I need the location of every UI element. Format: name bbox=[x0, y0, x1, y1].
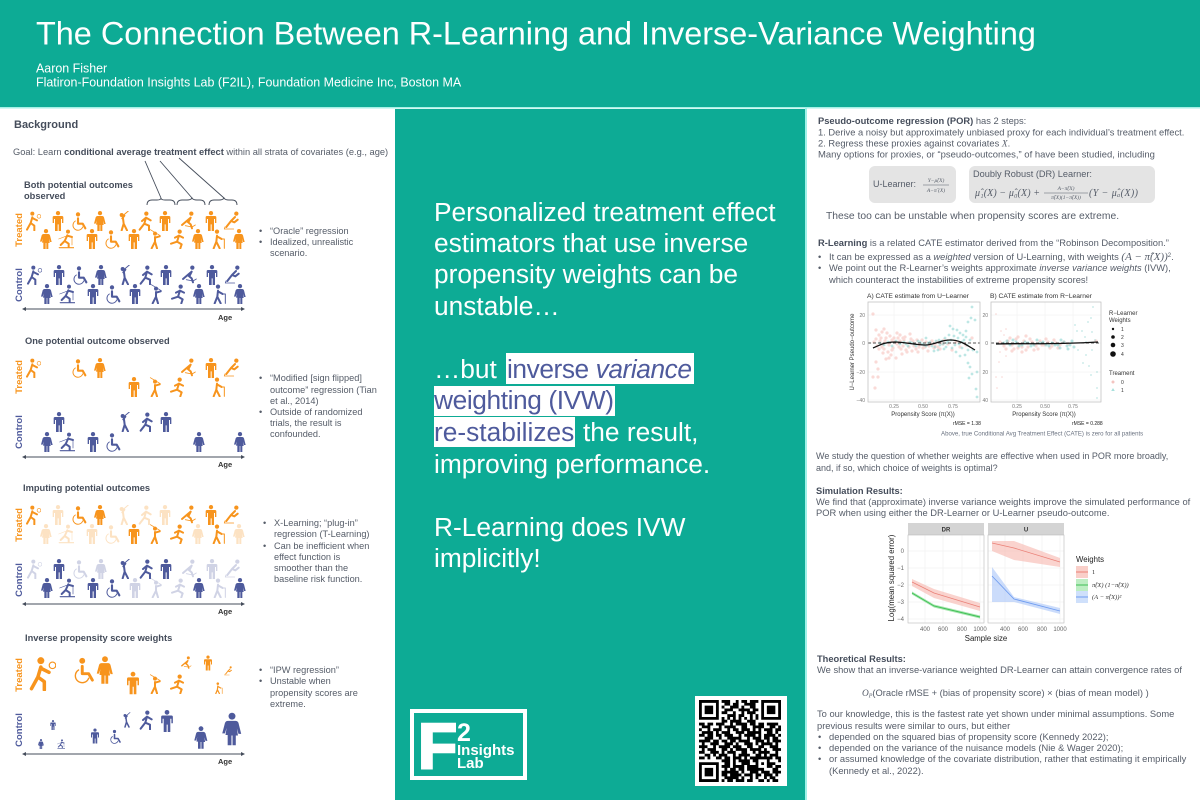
legend: weights and treatment: Weights bbox=[1109, 318, 1131, 324]
notes: x-learning: effect function is bbox=[274, 552, 341, 562]
control icons bbox=[28, 265, 246, 304]
R-learning text: We point out the R-Learner’s weights approximate inverse variance weights (IVW), bbox=[829, 263, 1171, 273]
simulation results text: Simulation Results: bbox=[816, 486, 903, 496]
control icons bbox=[41, 412, 246, 452]
panel B: CATE estimate from R-Learner: 20 bbox=[982, 313, 988, 319]
notes: modified outcome regression: Outside of randomized bbox=[270, 407, 362, 417]
panel: methods and results bbox=[816, 116, 1191, 776]
panel B: CATE estimate from R-Learner: 0 bbox=[985, 341, 988, 347]
axes: 400 bbox=[1000, 627, 1011, 633]
line chart: log mean squared error by sample size: Log(mean squared error) bbox=[887, 534, 896, 621]
notes: modified outcome regression: outcome” regression (Tian bbox=[270, 385, 377, 395]
pseudo-outcome regression text bbox=[818, 116, 1184, 160]
theoretical results text: • bbox=[818, 743, 821, 753]
message: unstable estimators bbox=[434, 197, 776, 321]
legend: weights and treatment: 1 bbox=[1121, 327, 1124, 333]
message: inverse variance weighting highlight: …but bbox=[434, 354, 498, 384]
notes: x-learning: smoother than the bbox=[274, 563, 348, 573]
message: unstable estimators: Personalized treatment effect bbox=[434, 197, 776, 227]
section 1: both potential outcomes: Both potential outcomes bbox=[24, 180, 133, 190]
authors bbox=[36, 62, 462, 90]
QR code bbox=[695, 696, 787, 786]
axes: 1000 bbox=[1053, 627, 1067, 633]
logo: F2 Insights Lab: 2 bbox=[457, 719, 471, 747]
line chart: log mean squared error by sample size: Sample size bbox=[965, 634, 1007, 643]
panel A: CATE estimate from U-Learner: −20 bbox=[857, 370, 865, 376]
R-learning text: It can be expressed as a weighted version of U-Learning, with weights (A − π̂(X)) bbox=[829, 251, 1168, 263]
theoretical results text bbox=[817, 654, 1187, 776]
treated label: Treated bbox=[14, 213, 25, 247]
notes: oracle regression: Idealized, unrealistic bbox=[270, 237, 354, 247]
theoretical results text: P bbox=[868, 694, 873, 700]
axes: −2 bbox=[897, 583, 905, 589]
goal text: Goal: Learn conditional average treatment effect within all strata of covariates (e.g., age) bbox=[13, 147, 388, 157]
message: unstable estimators: unstable… bbox=[434, 291, 560, 321]
panel B: CATE estimate from R-Learner: 0.25 bbox=[1012, 404, 1022, 410]
message: unstable estimators: propensity weights can be bbox=[434, 259, 738, 289]
notes: ipw regression: • bbox=[259, 665, 262, 675]
theoretical results text: O bbox=[862, 689, 869, 699]
message: inverse variance weighting highlight: improving performance. bbox=[434, 449, 710, 479]
section 4: inverse propensity score weights: Inverse propensity score weights bbox=[25, 633, 172, 643]
R-learning text: • bbox=[818, 252, 821, 262]
pseudo-outcome regression text: Pseudo-outcome regression (POR) has 2 steps: bbox=[818, 116, 1026, 126]
axes: 600 bbox=[1018, 627, 1029, 633]
panel B: CATE estimate from R-Learner: 20 bbox=[982, 370, 988, 376]
panel A: CATE estimate from U-Learner bbox=[850, 293, 981, 427]
notes: x-learning: Can be inefficient when bbox=[274, 541, 369, 551]
notes: ipw regression bbox=[259, 665, 358, 709]
control label: Control bbox=[14, 268, 25, 302]
panel B: CATE estimate from R-Learner: Propensity Score (π(X)) bbox=[1012, 412, 1076, 418]
axes: 600 bbox=[938, 627, 949, 633]
age axis bbox=[22, 307, 245, 322]
age axis: Age bbox=[218, 607, 232, 616]
section 1: both potential outcomes: observed bbox=[24, 191, 66, 201]
age axis bbox=[22, 752, 245, 766]
R-learning text: • bbox=[818, 263, 821, 273]
formula box: DR Learner bbox=[969, 166, 1155, 203]
theoretical results text: previous results were similar to ours, but either bbox=[817, 721, 1010, 731]
logo: F2 Insights Lab: Insights bbox=[457, 742, 515, 759]
section 3: imputing potential outcomes bbox=[14, 483, 370, 616]
message: unstable estimators: estimators that use inverse bbox=[434, 228, 748, 258]
theoretical results text: depended on the squared bias of propensity score (Kennedy 2022); bbox=[829, 732, 1108, 742]
panel B: CATE estimate from R-Learner: 0.50 bbox=[1040, 404, 1050, 410]
treated icons bbox=[27, 358, 238, 397]
simulation results text: We find that (approximate) inverse variance weights improve the simulated performance of bbox=[816, 497, 1191, 507]
note: unstable: These too can be unstable when propensity scores are extreme. bbox=[826, 211, 1119, 222]
authors: Flatiron-Foundation Insights Lab (F2IL), Foundation Medicine Inc, Boston MA bbox=[36, 76, 462, 90]
panel A: CATE estimate from U-Learner: 0.75 bbox=[948, 404, 958, 410]
notes: modified outcome regression: • bbox=[259, 373, 262, 383]
formula box: DR Learner: Doubly Robust (DR) Learner: bbox=[973, 169, 1092, 179]
legend: weights: 1 bbox=[1092, 569, 1095, 576]
panel A: CATE estimate from U-Learner: Propensity Score (π(X)) bbox=[891, 412, 955, 418]
axes: 0 bbox=[901, 549, 905, 555]
edge strip of right panel bbox=[805, 108, 807, 800]
notes: x-learning: X-Learning; “plug-in” bbox=[274, 518, 358, 528]
header band bbox=[0, 0, 1200, 108]
R-learning text: 2 bbox=[1168, 253, 1172, 259]
R-learning text: . bbox=[1171, 252, 1174, 262]
facet: DR: DR bbox=[942, 528, 951, 534]
legend: weights: π̂(X) (1−π̂(X)) bbox=[1092, 582, 1129, 589]
legend: weights and treatment: 1 bbox=[1121, 388, 1124, 394]
legend: weights bbox=[1076, 555, 1129, 603]
question text: We study the question of whether weights are effective when used in POR more broadly, bbox=[816, 451, 1168, 461]
panel B: CATE estimate from R-Learner bbox=[982, 293, 1103, 427]
theoretical results text: (Kennedy et al., 2022). bbox=[829, 766, 924, 776]
treated icons sized by weight bbox=[32, 656, 232, 694]
message: r-learning: implicitly! bbox=[434, 543, 541, 573]
R-learning text: R-Learning is a related CATE estimator derived from the “Robinson Decomposition.” bbox=[818, 238, 1169, 248]
theoretical results text: To our knowledge, this is the fastest rate yet shown under minimal assumptions. Some bbox=[817, 709, 1174, 719]
facet: U: U bbox=[1024, 528, 1028, 534]
logo: F2 Insights Lab: Lab bbox=[457, 755, 484, 772]
panel A: CATE estimate from U-Learner: 0 bbox=[862, 341, 865, 347]
axes: 400 bbox=[920, 627, 931, 633]
theoretical results text: We show that an inverse-variance weighted DR-Learner can attain convergence rates of bbox=[817, 665, 1182, 675]
notes: modified outcome regression: confounded. bbox=[270, 429, 321, 439]
notes: oracle regression: • bbox=[259, 237, 262, 247]
notes: x-learning: • bbox=[263, 518, 266, 528]
panel A: CATE estimate from U-Learner: rMSE = 1.38 bbox=[953, 421, 981, 427]
axes: −3 bbox=[897, 600, 905, 606]
section 4: inverse propensity score weights bbox=[14, 633, 358, 766]
age axis: Age bbox=[218, 460, 232, 469]
theoretical results text: • bbox=[818, 732, 821, 742]
legend: weights and treatment bbox=[1109, 311, 1138, 394]
legend: weights: (A − π̂(X))² bbox=[1092, 594, 1122, 601]
control icons bbox=[28, 559, 246, 598]
notes: ipw regression: extreme. bbox=[270, 699, 306, 709]
brace connectors bbox=[145, 158, 237, 205]
notes: ipw regression: “IPW regression” bbox=[270, 665, 339, 675]
section 2: one potential outcome bbox=[14, 336, 377, 469]
theoretical results text: or assumed knowledge of the covariate distribution, rather that estimating it empirically bbox=[829, 754, 1187, 764]
panel A: CATE estimate from U-Learner: −40 bbox=[857, 398, 865, 404]
panel B: CATE estimate from R-Learner: 0.75 bbox=[1068, 404, 1078, 410]
heading: background: Background bbox=[14, 119, 78, 131]
notes: modified outcome regression bbox=[259, 373, 377, 439]
R-learning text bbox=[818, 238, 1174, 285]
legend: weights and treatment: 3 bbox=[1121, 343, 1124, 349]
axes: 1000 bbox=[973, 627, 987, 633]
control label: Control bbox=[14, 563, 25, 597]
age axis: Age bbox=[218, 313, 232, 322]
authors: Aaron Fisher bbox=[36, 62, 107, 76]
notes: modified outcome regression: • bbox=[259, 407, 262, 417]
question text bbox=[816, 451, 1168, 473]
legend: weights and treatment: 2 bbox=[1121, 335, 1124, 341]
notes: x-learning: • bbox=[263, 541, 266, 551]
treated label: Treated bbox=[14, 360, 25, 394]
message: r-learning bbox=[434, 512, 686, 573]
notes: x-learning: baseline risk function. bbox=[274, 574, 362, 584]
notes: oracle regression: “Oracle” regression bbox=[270, 226, 349, 236]
legend: weights and treatment: 4 bbox=[1121, 352, 1124, 358]
panel A: CATE estimate from U-Learner: 20 bbox=[859, 313, 865, 319]
treated icons bbox=[27, 211, 245, 249]
treated label: Treated bbox=[14, 508, 25, 542]
notes: x-learning: regression (T-Learning) bbox=[274, 529, 370, 539]
facet: DR bbox=[908, 523, 984, 623]
panel: background bbox=[13, 119, 388, 766]
notes: oracle regression: scenario. bbox=[270, 248, 307, 258]
notes: oracle regression bbox=[259, 226, 354, 258]
message: r-learning: R-Learning does IVW bbox=[434, 512, 686, 542]
panel B: CATE estimate from R-Learner: B) CATE estimate from R−Learner bbox=[990, 293, 1093, 300]
panel B: CATE estimate from R-Learner: 40 bbox=[982, 398, 988, 404]
legend: weights: Weights bbox=[1076, 555, 1104, 564]
notes: ipw regression: • bbox=[259, 676, 262, 686]
panel A: CATE estimate from U-Learner: U−Learner Pseudo−outcome bbox=[850, 313, 856, 391]
theoretical results text: • bbox=[818, 754, 821, 764]
formula box: DR Learner: (Y − μ̂ₐ(X)) bbox=[1089, 188, 1139, 199]
notes: oracle regression: • bbox=[259, 226, 262, 236]
chart caption: Above, true Conditional Avg Treatment Effect (CATE) is zero for all patients bbox=[941, 430, 1143, 438]
control label: Control bbox=[14, 713, 25, 747]
formula box: U-Learner: A−π̂ (X) bbox=[926, 187, 945, 194]
facet: U bbox=[988, 523, 1064, 623]
panel A: CATE estimate from U-Learner: A) CATE estimate from U−Learner bbox=[867, 293, 970, 300]
treated icons bbox=[27, 505, 245, 544]
notes: x-learning bbox=[263, 518, 370, 584]
legend: weights and treatment: Treament bbox=[1109, 371, 1135, 377]
control icons sized by weight bbox=[38, 710, 241, 749]
notes: ipw regression: propensity scores are bbox=[270, 688, 358, 698]
axes: −4 bbox=[897, 617, 905, 623]
panel: key message bbox=[395, 109, 805, 800]
age axis: Age bbox=[218, 757, 232, 766]
notes: modified outcome regression: et al., 2014) bbox=[270, 396, 319, 406]
age axis bbox=[22, 602, 245, 616]
notes: modified outcome regression: “Modified [sign flipped] bbox=[270, 373, 362, 383]
section 1: both potential outcomes bbox=[14, 180, 354, 322]
panel A: CATE estimate from U-Learner: 0.50 bbox=[918, 404, 928, 410]
pseudo-outcome regression text: 2. Regress these proxies against covariates X. bbox=[818, 138, 1010, 150]
panel B: CATE estimate from R-Learner: rMSE = 0.288 bbox=[1072, 421, 1103, 427]
scatter chart: U-Learner vs R-Learner bbox=[850, 293, 1138, 427]
panel A: CATE estimate from U-Learner: 0.25 bbox=[889, 404, 899, 410]
theoretical results text: (Oracle rMSE + (bias of propensity score) × (bias of mean model) ) bbox=[872, 688, 1149, 698]
simulation results text bbox=[816, 486, 1191, 518]
notes: ipw regression: Unstable when bbox=[270, 676, 331, 686]
age axis bbox=[22, 455, 245, 469]
formula box: DR Learner: A−π̂(X) bbox=[1057, 185, 1075, 192]
formula box: U-Learner: U-Learner: bbox=[873, 179, 916, 189]
section 3: imputing potential outcomes: Imputing potential outcomes bbox=[23, 483, 150, 493]
section 2: one potential outcome: One potential outcome observed bbox=[25, 336, 170, 346]
theoretical results text: depended on the variance of the nuisance models (Nie & Wager 2020); bbox=[829, 743, 1123, 753]
formula box: DR Learner: μ̂₁(X) − μ̂₀(X) + bbox=[974, 188, 1040, 199]
question text: and, if so, which choice of weights is optimal? bbox=[816, 463, 998, 473]
legend: weights and treatment: 0 bbox=[1121, 380, 1124, 386]
formula box: U-Learner bbox=[869, 166, 956, 203]
formula box: U-Learner: Y−μ̂(X) bbox=[928, 177, 944, 184]
simulation results text: POR when using either the DR-Learner or U-Learner pseudo-outcome. bbox=[816, 508, 1109, 518]
axes: 800 bbox=[957, 627, 968, 633]
pseudo-outcome regression text: 1. Derive a noisy but approximately unbiased proxy for each individual’s treatment effect. bbox=[818, 128, 1184, 138]
logo: F2 Insights Lab bbox=[412, 710, 525, 782]
message: inverse variance weighting highlight: inverse variance bbox=[507, 354, 692, 384]
notes: modified outcome regression: trials, the result is bbox=[270, 418, 342, 428]
formula box: DR Learner: π̂(X)(1−π̂(X)) bbox=[1051, 194, 1081, 201]
pseudo-outcome regression text: Many options for proxies, or “pseudo-outcomes,” of have been studied, including bbox=[818, 150, 1155, 160]
line chart: log mean squared error by sample size bbox=[887, 523, 1129, 643]
theoretical results text: Theoretical Results: bbox=[817, 654, 906, 664]
message: inverse variance weighting highlight: the result, bbox=[583, 417, 698, 447]
message: inverse variance weighting highlight: weighting (IVW) bbox=[433, 385, 614, 415]
title: The Connection Between R-Learning and Inverse-Variance Weighting bbox=[36, 16, 1036, 52]
axes: 800 bbox=[1037, 627, 1048, 633]
R-learning text: which counteract the instabilities of extreme propensity scores! bbox=[828, 275, 1088, 285]
legend: weights and treatment: R−Learner bbox=[1109, 311, 1138, 317]
message: inverse variance weighting highlight bbox=[433, 353, 710, 479]
logo: F2 Insights Lab: F bbox=[418, 710, 457, 782]
message: inverse variance weighting highlight: re-stabilizes bbox=[434, 417, 574, 447]
treated label: Treated bbox=[14, 658, 25, 692]
axes bbox=[897, 549, 1067, 633]
control label: Control bbox=[14, 415, 25, 449]
axes: −1 bbox=[897, 566, 905, 572]
